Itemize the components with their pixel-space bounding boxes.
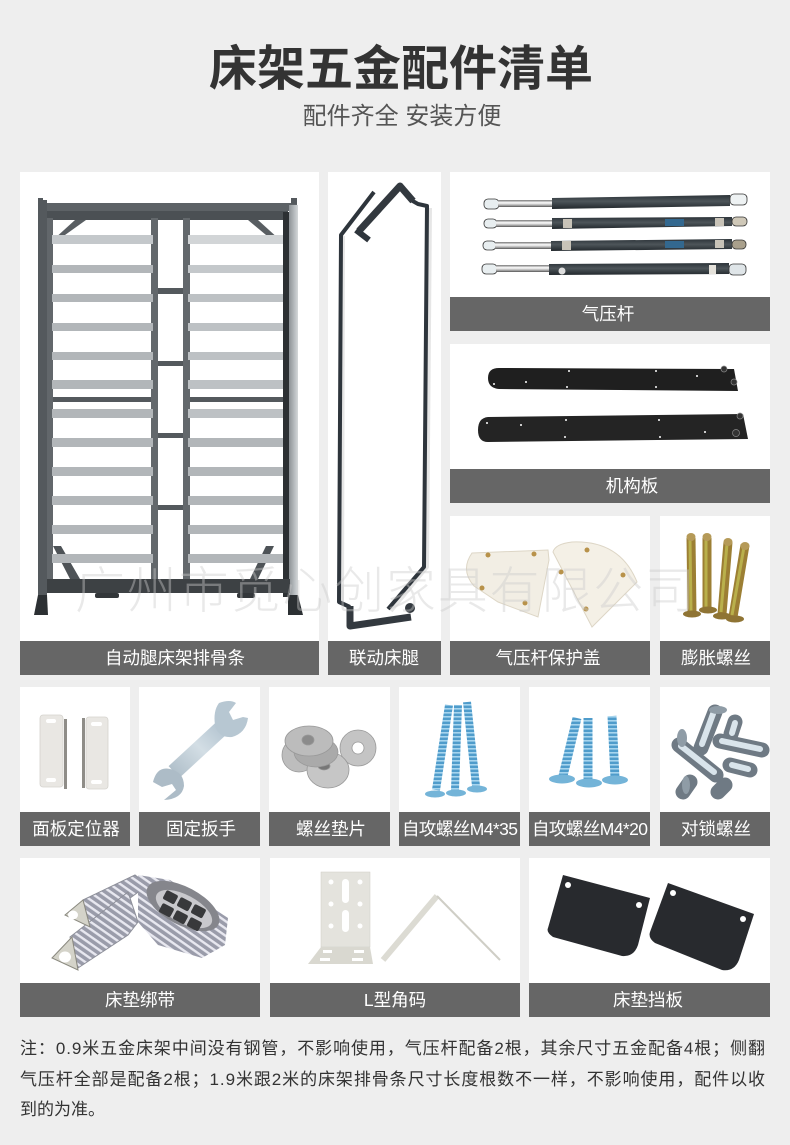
panel: L bracket <box>270 858 520 1017</box>
wrench illustration <box>153 701 248 800</box>
caption <box>328 641 441 675</box>
caption <box>269 812 390 846</box>
caption <box>450 297 770 331</box>
panel: wrench <box>139 687 260 846</box>
panel: screws M4*35 <box>399 687 520 846</box>
panel: mattress baffle <box>529 858 770 1017</box>
note text: 气压杆全部是配备2根；1.9米跟2米的床架排骨条尺寸长度根数不一样，不影响使用，配件以收 <box>20 1069 765 1089</box>
screws illustration <box>425 702 487 798</box>
panel: mattress strap <box>20 858 260 1017</box>
washers illustration <box>282 726 376 788</box>
note text: 到的为准。 <box>20 1100 105 1119</box>
note text <box>20 1038 765 1119</box>
panel: lock screws <box>660 687 770 846</box>
watermark: 广州市觅心创家具有限公司 <box>75 551 695 623</box>
brackets illustration <box>308 872 500 964</box>
panel: expansion bolts <box>660 516 770 675</box>
caption <box>529 812 650 846</box>
caption: 自攻螺丝M4*35 <box>402 819 518 839</box>
screws illustration <box>549 716 628 788</box>
frame illustration <box>34 198 303 615</box>
caption: 固定扳手 <box>166 819 236 839</box>
caption: 螺丝垫片 <box>296 819 366 839</box>
caption: L型角码 <box>364 990 426 1010</box>
panel: gas strut <box>450 172 770 331</box>
leg illustration <box>339 186 430 626</box>
caption <box>660 812 770 846</box>
gas struts illustration <box>482 194 747 275</box>
caption: 气压杆 <box>582 304 634 324</box>
caption <box>660 641 770 675</box>
caption <box>270 983 520 1017</box>
panel: mechanism plate <box>450 344 770 503</box>
covers illustration <box>466 542 637 627</box>
plates illustration <box>478 366 748 442</box>
caption: 自动腿床架排骨条 <box>105 648 245 668</box>
caption: 气压杆保护盖 <box>496 648 600 668</box>
panel: gas strut cover <box>450 516 650 675</box>
panel: panel locator <box>20 687 130 846</box>
caption <box>529 983 770 1017</box>
panel: washers <box>269 687 390 846</box>
caption <box>20 641 319 675</box>
panel: bed frame <box>20 172 319 675</box>
panel: screws M4*20 <box>529 687 650 846</box>
subtitle: 配件齐全 安装方便 <box>303 103 501 130</box>
strap illustration <box>52 870 228 970</box>
bolts illustration <box>683 533 750 622</box>
caption: 对锁螺丝 <box>681 819 751 839</box>
caption: 面板定位器 <box>32 819 120 839</box>
caption <box>399 812 520 846</box>
slats <box>52 235 283 563</box>
caption <box>139 812 260 846</box>
caption: 自攻螺丝M4*20 <box>532 819 648 839</box>
caption <box>20 983 260 1017</box>
note text: 注：0.9米五金床架中间没有钢管，不影响使用，气压杆配备2根，其余尺寸五金配备4根；侧翻 <box>20 1038 765 1058</box>
caption <box>20 812 130 846</box>
baffles illustration <box>548 875 754 970</box>
title: 床架五金配件清单 <box>209 43 593 96</box>
caption: 联动床腿 <box>349 648 419 668</box>
magnets illustration <box>40 715 108 789</box>
caption: 床垫挡板 <box>613 990 683 1010</box>
caption: 床垫绑带 <box>105 990 175 1010</box>
panel: linked bed leg <box>328 172 441 675</box>
lock screws illustration <box>677 706 762 794</box>
caption: 膨胀螺丝 <box>681 648 751 668</box>
caption <box>450 469 770 503</box>
caption <box>450 641 650 675</box>
caption: 机构板 <box>606 476 658 496</box>
